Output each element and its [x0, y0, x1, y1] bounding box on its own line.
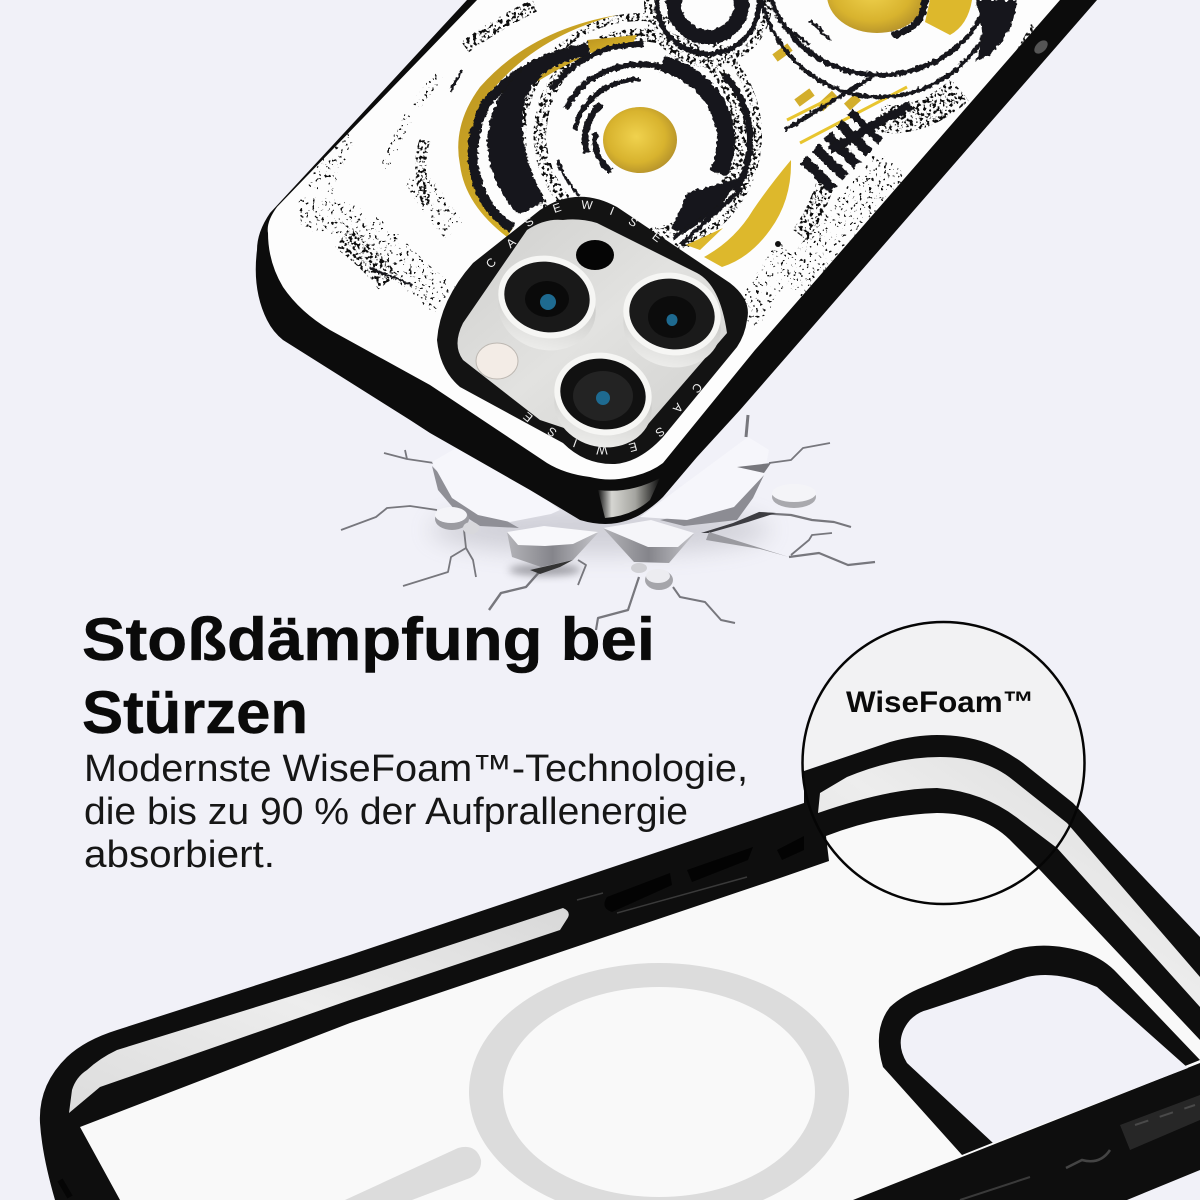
lens 3 — [547, 344, 659, 456]
camera cutout opening — [901, 975, 1188, 1143]
phone with case, dropping onto ground — [256, 0, 1097, 524]
camera plate — [458, 219, 727, 440]
right slab — [640, 437, 789, 557]
body text: Modernste WiseFoam™-Technologie, — [84, 748, 748, 790]
brand text ring: E — [627, 439, 639, 455]
clear back panel — [80, 813, 1200, 1200]
microphone hole — [576, 240, 614, 270]
left slab — [432, 440, 560, 528]
brand text ring — [483, 198, 705, 457]
body text: absorbiert. — [84, 834, 275, 876]
lens 2 — [616, 264, 728, 376]
brand text ring: C — [483, 255, 499, 271]
brand text ring: A — [670, 400, 686, 416]
brand text ring: I — [608, 204, 616, 218]
middle rock left — [507, 526, 598, 576]
brand text ring: S — [653, 424, 667, 440]
paint spatter dot — [775, 241, 781, 247]
brand text ring: A — [503, 235, 519, 251]
camera cutout frame — [879, 946, 1200, 1155]
abstract swirl artwork — [300, 0, 1042, 320]
sparse speckle — [300, 75, 900, 320]
top-right frame window strip — [818, 757, 1200, 1007]
middle rock right — [603, 520, 694, 563]
heading: Stürzen — [82, 679, 308, 746]
body text: die bis zu 90 % der Aufprallenergie — [84, 791, 688, 833]
brand text ring: W — [581, 198, 594, 213]
case frame — [40, 735, 1200, 1200]
brand text ring: E — [520, 409, 536, 425]
printed back panel — [268, 0, 1060, 480]
WiseFoam callout circle — [802, 622, 1084, 904]
side buttons — [577, 836, 804, 913]
crack lines — [341, 415, 875, 630]
callout label: WiseFoam™ — [846, 686, 1034, 719]
brand text ring: I — [571, 436, 579, 450]
gold paint pools — [603, 0, 927, 173]
flash — [476, 343, 518, 379]
corner gloss — [598, 478, 660, 518]
small debris — [435, 484, 816, 590]
MagSafe ring — [469, 963, 849, 1200]
brand text ring: C — [689, 380, 705, 396]
camera bump rim — [437, 197, 748, 464]
brand text ring: S — [545, 424, 559, 440]
dense brush speckle — [342, 0, 1042, 282]
heading: Stoßdämpfung bei — [82, 606, 655, 673]
open transparent case — [40, 735, 1200, 1200]
case body — [256, 0, 1097, 524]
brand text ring: E — [650, 229, 664, 245]
body text — [84, 748, 748, 876]
cracked ground impact — [341, 415, 875, 630]
left frame window strip — [69, 908, 569, 1113]
charging port and speaker details — [60, 1095, 1200, 1200]
side button glint — [1032, 38, 1050, 56]
brand text ring: E — [551, 200, 563, 216]
MagSafe alignment pill — [345, 1147, 481, 1200]
gold brush strokes — [458, 0, 972, 267]
brand text ring: S — [626, 214, 640, 230]
heading — [82, 606, 655, 746]
lens 1 — [491, 247, 603, 359]
black brush strokes — [370, 0, 1017, 285]
brand text ring: W — [596, 443, 608, 457]
magnifier background — [802, 622, 1084, 904]
brand text ring: S — [522, 214, 536, 230]
gold ribbed bars — [775, 47, 907, 143]
